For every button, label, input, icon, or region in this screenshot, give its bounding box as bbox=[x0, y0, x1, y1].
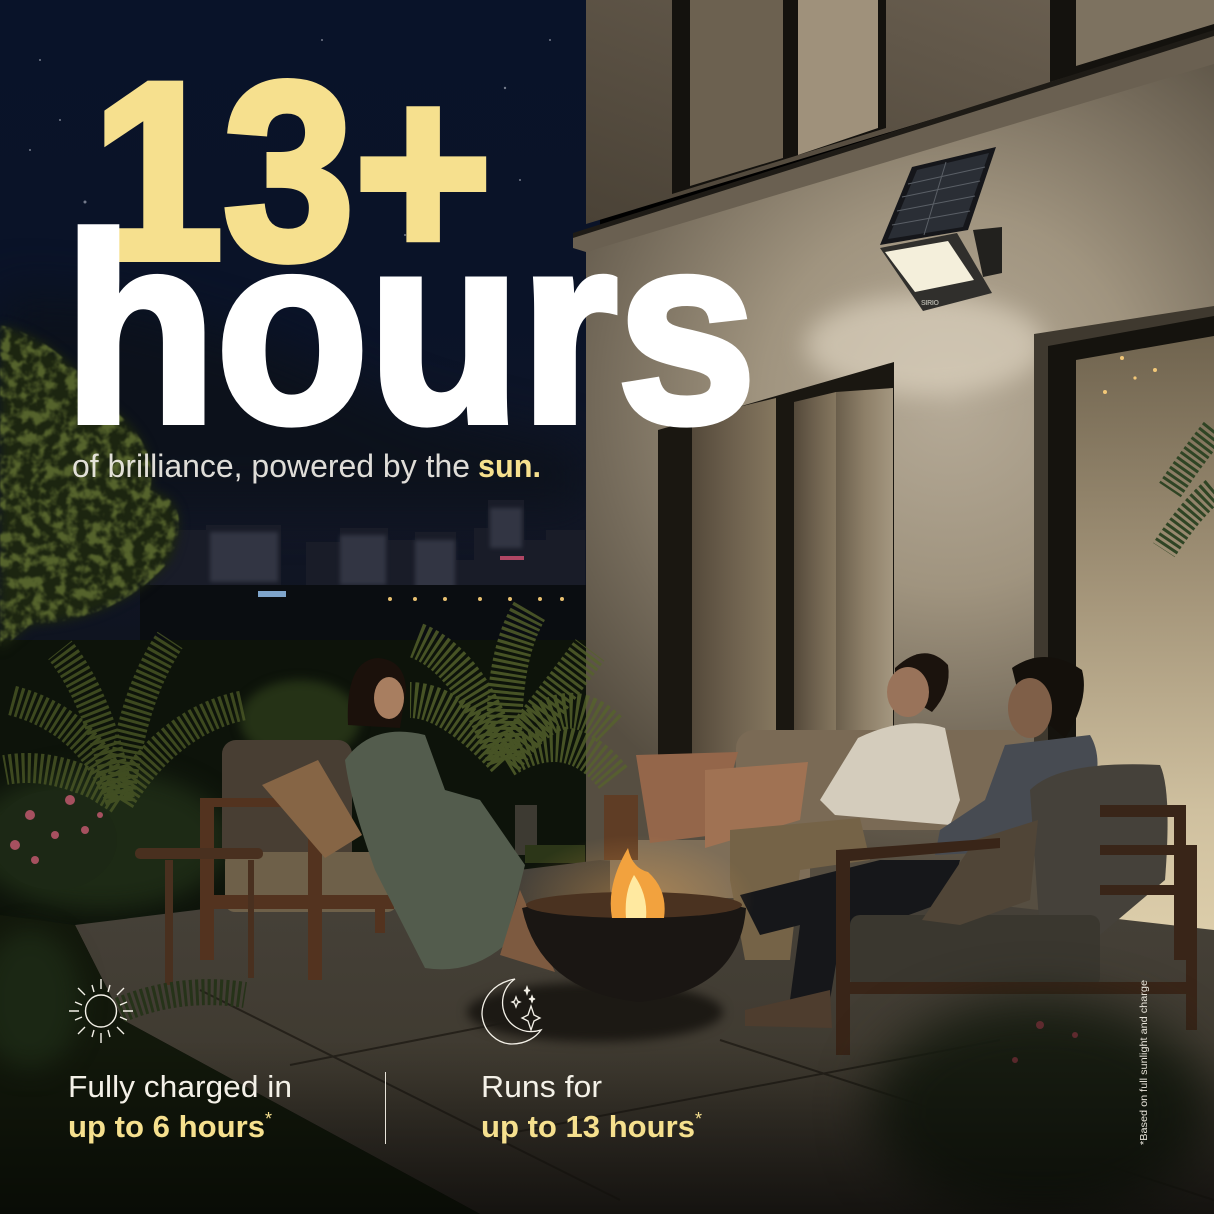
side table bbox=[135, 848, 263, 985]
patio floor bbox=[75, 860, 1214, 1214]
stat: run time: Runs for bbox=[481, 1069, 602, 1104]
mounting bracket bbox=[973, 227, 1002, 277]
stat: charge time: Fully charged in bbox=[68, 1069, 292, 1104]
palm plants bbox=[5, 610, 615, 800]
upper floor wall bbox=[586, 0, 1214, 224]
subheading: of brilliance, powered by the bbox=[72, 448, 470, 484]
stat: run time bbox=[481, 1069, 702, 1144]
cornice bbox=[573, 30, 1214, 252]
solar panel bbox=[880, 147, 996, 245]
stat: run time: * bbox=[695, 1109, 702, 1129]
tree bbox=[0, 325, 179, 650]
pink flowers bbox=[0, 790, 117, 890]
fire pit bbox=[467, 835, 755, 1042]
stat: run time: up to 13 hours bbox=[481, 1109, 695, 1144]
stat: charge time: * bbox=[265, 1109, 272, 1129]
solar flood light bbox=[880, 147, 1002, 311]
light glow on wall bbox=[805, 295, 1045, 395]
divider bbox=[385, 1072, 386, 1144]
bottom shade bbox=[0, 1040, 1214, 1214]
main lit wall bbox=[586, 60, 1214, 980]
woman bbox=[345, 658, 555, 972]
sofa with two men bbox=[604, 653, 1197, 1055]
footnote: *Based on full sunlight and charge bbox=[1138, 980, 1150, 1145]
stat: charge time bbox=[68, 1069, 292, 1144]
city skyline bbox=[140, 500, 586, 645]
man in white shirt bbox=[730, 653, 960, 960]
upper floor windows bbox=[672, 0, 1214, 194]
left armchair with woman bbox=[200, 658, 555, 980]
lamp housing bbox=[880, 233, 992, 311]
night sky with stars bbox=[0, 0, 600, 640]
subheading: sun. bbox=[478, 448, 541, 484]
icon: moon and stars bbox=[482, 979, 541, 1044]
man in grey shirt bbox=[740, 657, 1098, 1028]
armchair right bbox=[836, 764, 1197, 1055]
lamp housing: SIRIO bbox=[921, 300, 940, 307]
right patio door bbox=[1034, 306, 1214, 930]
garden background bbox=[0, 640, 586, 930]
icon: sun bbox=[69, 979, 133, 1043]
headline word: hours bbox=[64, 181, 756, 478]
stat: charge time: up to 6 hours bbox=[68, 1109, 265, 1144]
floor joints bbox=[200, 990, 1214, 1200]
headline number: 13+ bbox=[92, 31, 492, 312]
bottom foliage bbox=[0, 930, 1210, 1214]
left patio door bbox=[658, 362, 894, 760]
lawn bbox=[0, 915, 480, 1214]
